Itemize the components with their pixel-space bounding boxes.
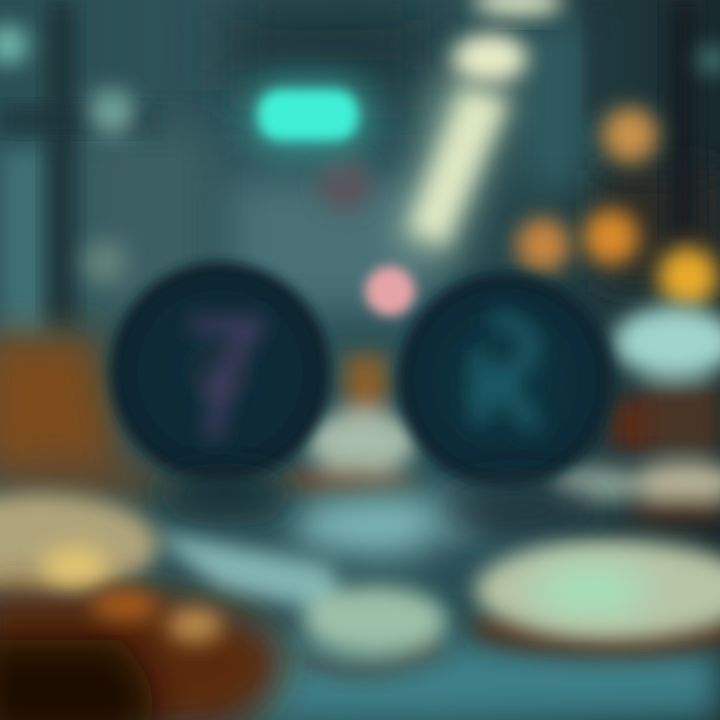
teal glyph [470,320,535,430]
pink bokeh light [365,266,415,316]
neon teal sign [248,78,370,152]
coin stands [160,475,600,532]
background lights: teal bokeh [0,25,720,284]
right coin [398,273,612,487]
orange bokeh lights [516,107,718,307]
left coin [110,262,330,482]
foreground discs centre [150,530,447,673]
purple glyph [190,325,255,440]
teal foreground floor [250,495,720,720]
foreground bottom-left cream disc and brown base [0,493,285,720]
centre disc stack [275,355,417,491]
brown stack left [0,335,175,504]
foreground disc right [470,540,720,656]
light beam [395,0,564,270]
right upper pale disc and stack [550,306,720,522]
